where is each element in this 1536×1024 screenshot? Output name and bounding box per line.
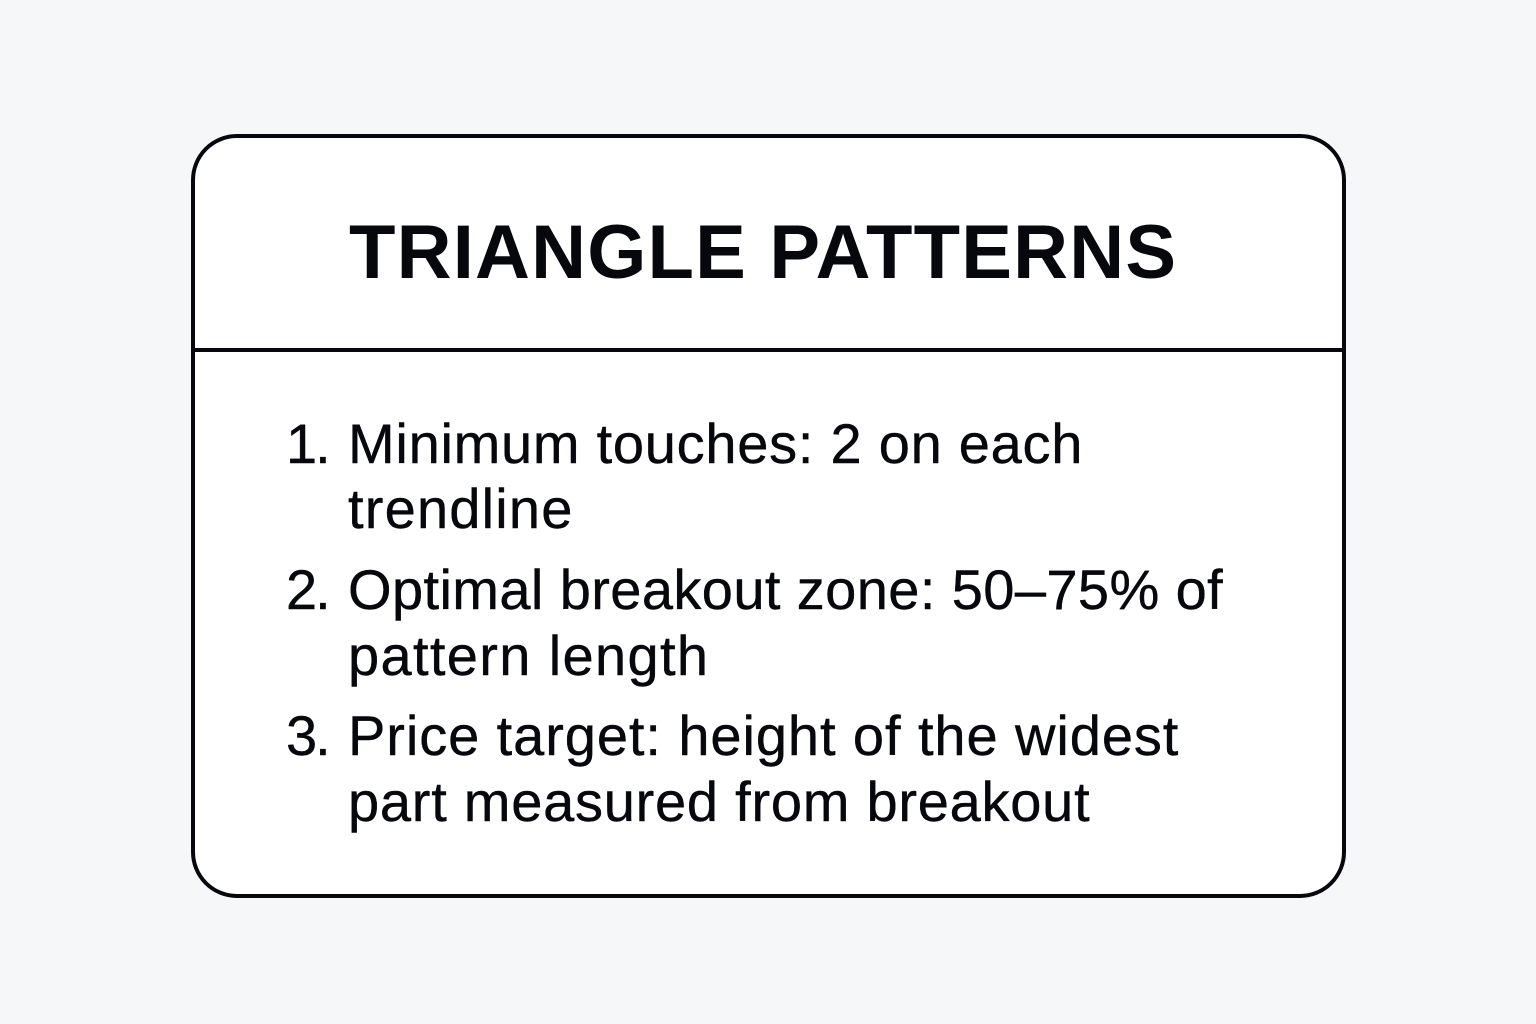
title: TRIANGLE PATTERNS [349,210,1177,295]
list item 3 number: 3. [286,704,329,767]
list item 2 text: pattern length [348,624,709,687]
list item 1 number: 1. [286,412,329,475]
list item 3 text [348,704,1179,833]
list item 2 text: Optimal breakout zone: 50–75% of [348,558,1223,621]
list item 3 text: Price target: height of the widest [348,704,1179,767]
panel: triangle patterns card [191,134,1346,898]
list item 1 text: Minimum touches: 2 on each [348,412,1083,475]
list item 1 text [348,412,1083,540]
list item 2 number: 2. [286,558,329,621]
list item 3 text: part measured from breakout [348,770,1090,833]
list item 1 text: trendline [348,477,574,540]
list item 2 text [348,558,1223,687]
